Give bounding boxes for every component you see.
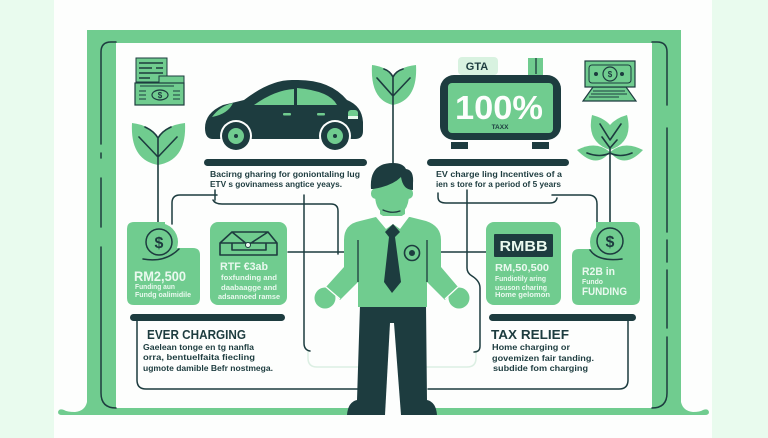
panel: RTF funding: foxfunding and [221,273,277,282]
panel: RTF funding [210,222,287,305]
legs and shoes [347,305,437,415]
icon: tax device: TAXX [492,124,509,131]
panel: R2B funding: Fundo [582,279,603,286]
icon: tax device: GTA [466,61,488,73]
panel: RMBB funding: RM,50,500 [495,262,549,274]
heading bar: tax [427,159,569,166]
panel: RM2,500 funding [127,222,200,305]
icon: banknote on stand [583,61,636,101]
panel: RM2,500 funding: Fundg oalimidile [135,292,191,299]
panel: RM2,500 funding: Funding aun [135,284,175,291]
panel: RMBB funding: ususon charing [495,283,547,292]
green frame [58,30,709,415]
panel: RTF funding: RTF €3ab [220,261,268,273]
text block: tax relief: govemizen fair tanding. [492,354,594,363]
text block: EV charging: Gaelean tonge en tg nanfla [143,343,255,352]
text: car caption: Bacirng gharing for goniontaling lug [210,170,360,179]
connector lines [137,190,628,389]
icon: dollar coin: $ [606,234,615,251]
icon: right plant [577,115,643,224]
arms and hands [326,267,358,300]
text block: EV charging [143,328,273,373]
panel: RTF funding: adsannoed ramse [218,294,280,301]
text block: tax relief: subdide fom charging [493,364,588,373]
text block: tax relief: TAX RELIEF [491,328,569,342]
torso [344,217,441,307]
icon: tax device [440,57,561,149]
panel: RMBB funding [486,222,561,305]
icon: cash stack [135,58,184,105]
text: tax caption: EV charge ling Incentives of a [436,170,563,179]
panel: RMBB funding: Fundiotily aring [495,274,546,283]
badge [404,246,420,260]
icon: electric car [205,80,363,152]
icon: dollar coin: $ [155,235,164,252]
panel: RMBB funding: RMBB [500,238,548,255]
icon: left plant [132,123,185,222]
figure: person in green shirt [314,163,470,415]
panel: R2B funding [572,222,640,305]
text block: tax relief: Home charging or [492,343,570,352]
text: car caption [210,170,360,189]
panel: RTF funding: daabaagge and [221,283,277,292]
text block: EV charging: ugmote damible Befr nostmega. [143,364,273,373]
heading bar: car [204,159,367,166]
neck and collar [376,214,409,229]
panel: R2B funding: R2B in [582,266,615,278]
head [371,188,413,199]
panel: R2B funding: FUNDING [582,286,627,298]
icon: tax device: 100% [455,89,543,126]
text: car caption: ETV s govinamess angtice yeays. [210,180,342,189]
text block: EV charging: EVER CHARGING [147,328,246,342]
panel: RM2,500 funding: RM2,500 [134,268,186,284]
icon: center plant [372,65,416,163]
icon: cash stack: $ [158,91,163,100]
text block: tax relief [491,328,594,373]
icon: open box [220,232,277,255]
text: tax caption: ien s tore for a period of 5 years [436,180,562,189]
icon: banknote on stand: $ [608,70,613,79]
text block: EV charging: orra, bentuelfaita fiecling [143,353,255,362]
panel: RMBB funding: Home gelomon [495,290,550,299]
text: tax caption [436,170,563,189]
tie [384,224,401,293]
heading bar: tax relief [489,314,636,321]
heading bar: EV charging [130,314,285,321]
